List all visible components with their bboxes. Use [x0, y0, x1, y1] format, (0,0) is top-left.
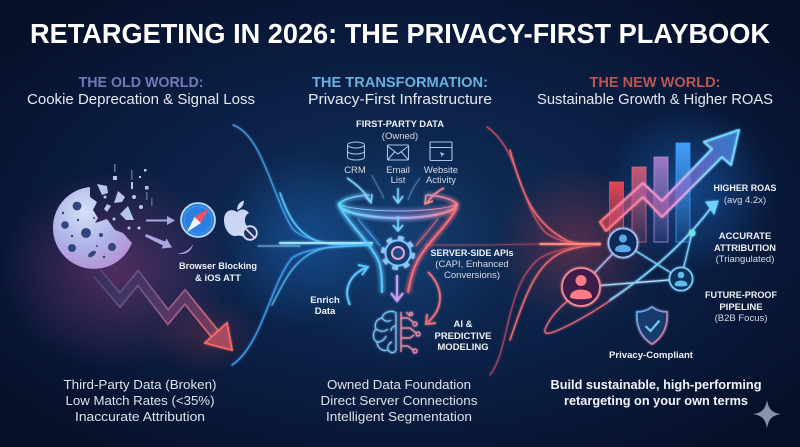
label: future-proof pipeline: (B2B Focus): [715, 313, 767, 324]
icon: brain: [373, 311, 420, 353]
text: new world closing statement: [550, 377, 762, 408]
arrows: cookie to browsers: [145, 216, 193, 254]
icon: safari compass: [181, 203, 215, 237]
icon: broken cookie: [53, 164, 152, 269]
label: ai and predictive modeling: [434, 319, 492, 353]
icon: sparkle: [753, 400, 781, 428]
text: transformation points: Intelligent Segmentation: [326, 409, 472, 424]
label: server-side apis: Conversions): [444, 270, 500, 281]
node: person right: [670, 268, 692, 290]
label: first-party data: (Owned): [382, 131, 418, 142]
label: first-party data: FIRST-PARTY DATA: [356, 119, 444, 130]
heading: transformation: THE TRANSFORMATION:: [312, 75, 488, 91]
label: server-side apis: [430, 248, 514, 281]
network: attribution links: [545, 201, 718, 333]
label: crm: CRM: [344, 165, 366, 176]
icon: privacy shield: [637, 307, 667, 344]
label: server-side apis: (CAPI, Enhanced: [435, 259, 509, 270]
label: higher roas: HIGHER ROAS: [714, 183, 776, 194]
label: browser blocking: & iOS ATT: [195, 273, 241, 284]
heading: old world: THE OLD WORLD:: [78, 75, 204, 91]
label: enrich data: Data: [315, 306, 336, 317]
subheading: old world: Cookie Deprecation & Signal Loss: [27, 91, 255, 108]
arrow: enrich loop: [347, 265, 368, 305]
funnel: [339, 195, 457, 292]
label: enrich data: Enrich: [310, 295, 340, 306]
flow lines: blue converging into funnel: [232, 125, 372, 365]
icon: website window: [430, 142, 452, 160]
text: old world points: [64, 377, 216, 424]
panel: old world: [27, 75, 257, 424]
icon: gear: [383, 238, 413, 268]
label: ai and predictive modeling: PREDICTIVE: [434, 331, 492, 342]
label: higher roas: [714, 183, 776, 206]
text: transformation points: Owned Data Foundation: [327, 377, 471, 392]
text: old world points: Inaccurate Attribution: [75, 409, 205, 424]
subheading: new world: Sustainable Growth & Higher ROAS: [537, 91, 773, 108]
label: browser blocking: Browser Blocking: [179, 261, 257, 272]
label: email list: List: [391, 175, 406, 186]
label: website activity: [424, 165, 458, 186]
node: person top: [608, 228, 638, 258]
title: RETARGETING IN 2026: THE PRIVACY-FIRST PLAYBOOK: [30, 18, 770, 49]
label: email list: Email: [386, 165, 410, 176]
arrow: falling signal: [97, 273, 232, 350]
label: higher roas: (avg 4.2x): [724, 195, 766, 206]
label: future-proof pipeline: FUTURE-PROOF: [705, 290, 777, 301]
label: first-party data: [356, 119, 444, 142]
text: old world points: Third-Party Data (Broken): [64, 377, 216, 392]
arrow: rising growth: [600, 130, 739, 231]
heading: new world: THE NEW WORLD:: [590, 75, 720, 91]
arrow: funnel to gear: [393, 216, 403, 231]
flow lines: red leaving funnel: [425, 127, 600, 375]
label: future-proof pipeline: [705, 290, 777, 324]
arrow: gear to brain: [391, 275, 403, 301]
arrows: data sources into funnel: [347, 175, 444, 204]
icon: crm database: [348, 142, 364, 160]
label: email list: [386, 165, 410, 186]
label: accurate attribution: ATTRIBUTION: [714, 243, 776, 254]
panel: transformation: [308, 75, 514, 424]
icon: blocked sign: [243, 226, 257, 240]
text: new world closing statement: Build sustainable, high-performing: [550, 377, 762, 392]
label: website activity: Activity: [426, 175, 456, 186]
label: future-proof pipeline: PIPELINE: [719, 302, 763, 313]
label: enrich data: [310, 295, 340, 317]
label: website activity: Website: [424, 165, 458, 176]
panel: new world: [537, 75, 781, 428]
text: old world points: Low Match Rates (<35%): [66, 393, 214, 408]
subheading: transformation: Privacy-First Infrastructure: [308, 91, 492, 108]
text: new world closing statement: retargeting on your own terms: [564, 393, 748, 408]
bar chart: growth: [599, 137, 708, 243]
node: person left: [562, 268, 600, 306]
icon: apple logo: [224, 200, 250, 236]
label: ai and predictive modeling: MODELING: [437, 342, 489, 353]
label: accurate attribution: (Triangulated): [716, 254, 774, 265]
label: accurate attribution: ACCURATE: [719, 231, 771, 242]
label: server-side apis: SERVER-SIDE APIs: [430, 248, 514, 259]
label: accurate attribution: [714, 231, 776, 265]
text: transformation points: Direct Server Connections: [320, 393, 478, 408]
label: privacy-compliant: Privacy-Compliant: [609, 350, 694, 361]
label: browser blocking: [179, 261, 257, 284]
label: ai and predictive modeling: AI &: [454, 319, 473, 330]
arrow: apis to ai: [426, 272, 440, 324]
icon: email envelope: [388, 145, 408, 160]
text: transformation points: [320, 377, 478, 424]
